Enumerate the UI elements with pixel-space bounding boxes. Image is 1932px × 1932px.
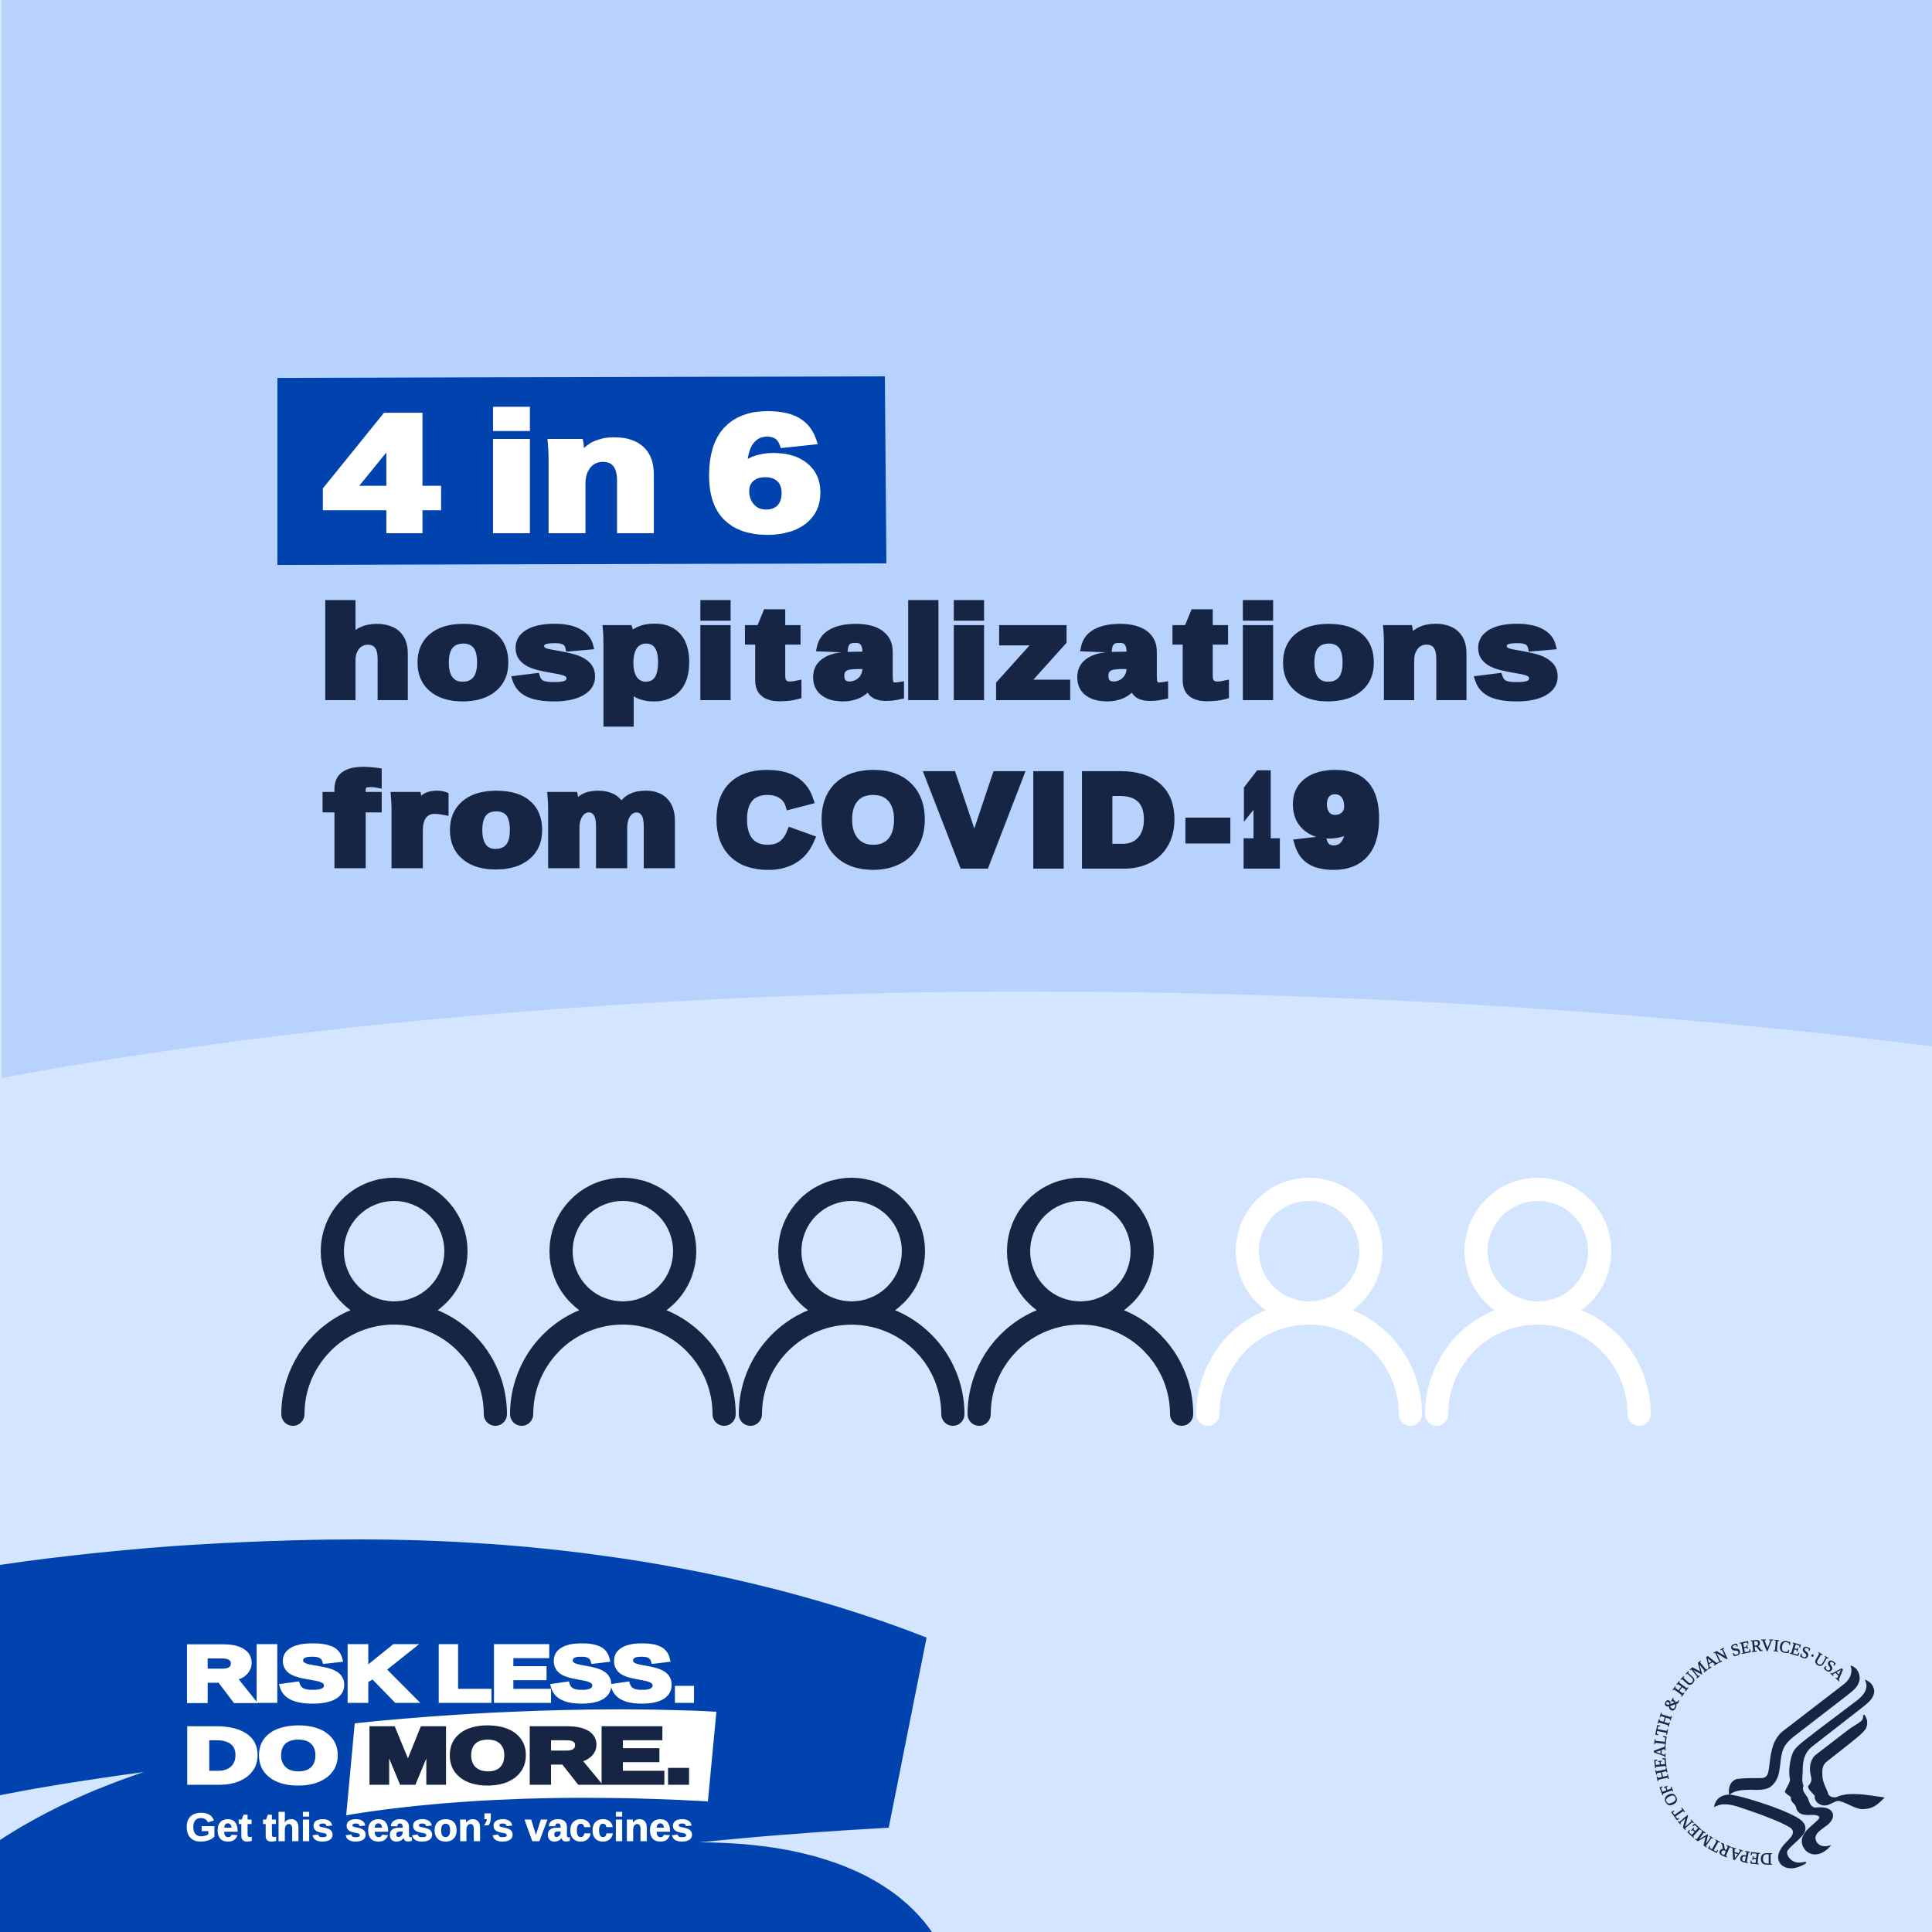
campaign banner shape <box>0 1539 932 1932</box>
campaign logo: Risk Less. Do More. <box>184 1631 716 1849</box>
highlight box behind 4 in 6 <box>277 376 886 565</box>
person 1 <box>293 1189 495 1414</box>
headline line: from COVID-19: 1 <box>1244 756 1277 885</box>
RISK LESS.: LESS. <box>436 1631 697 1717</box>
seal text ring: DEPARTMENT OF HEALTH & HUMAN SERVICES·USA <box>1654 1640 1843 1865</box>
MORE.: MORE. <box>366 1713 692 1799</box>
seal ring path <box>1665 1651 1855 1853</box>
eagle lower wing <box>1715 1795 1806 1868</box>
person 2 <box>522 1189 724 1414</box>
person 6 (white) <box>1437 1189 1639 1414</box>
person 3 <box>750 1189 953 1414</box>
eagle wing 1 <box>1730 1667 1859 1794</box>
eagle wing 2 and first face <box>1786 1681 1873 1854</box>
person 4 <box>979 1189 1182 1414</box>
headline line: hospitalizations: hospitalizations <box>319 581 1560 723</box>
headline line: from COVID-19: 9 <box>1294 750 1378 890</box>
RISK LESS.: RISK <box>184 1631 414 1717</box>
headline <box>277 376 1560 891</box>
statistic: 4 in 6 <box>325 381 823 564</box>
statistic: 4 in 6: 4 <box>325 381 437 564</box>
tagline: Get this season’s vaccines <box>185 1805 693 1849</box>
background: upper blue panel with curved edge <box>2 0 1932 1078</box>
person 5 (white) <box>1208 1189 1410 1414</box>
white flag behind MORE. <box>346 1709 716 1815</box>
RISK LESS.: DO <box>184 1713 338 1799</box>
headline line: from COVID-19: COVID- <box>716 750 1230 890</box>
headline line: from COVID-19: from <box>325 748 679 891</box>
statistic: 4 in 6: in <box>484 381 662 564</box>
headline line: from COVID-19 <box>325 748 1378 891</box>
pictogram: six people, four highlighted <box>293 1189 1639 1414</box>
RISK LESS. <box>184 1631 697 1799</box>
statistic: 4 in 6: 6 <box>706 381 823 564</box>
HHS seal <box>1654 1640 1885 1869</box>
eagle wing 3 and second face <box>1809 1715 1883 1808</box>
